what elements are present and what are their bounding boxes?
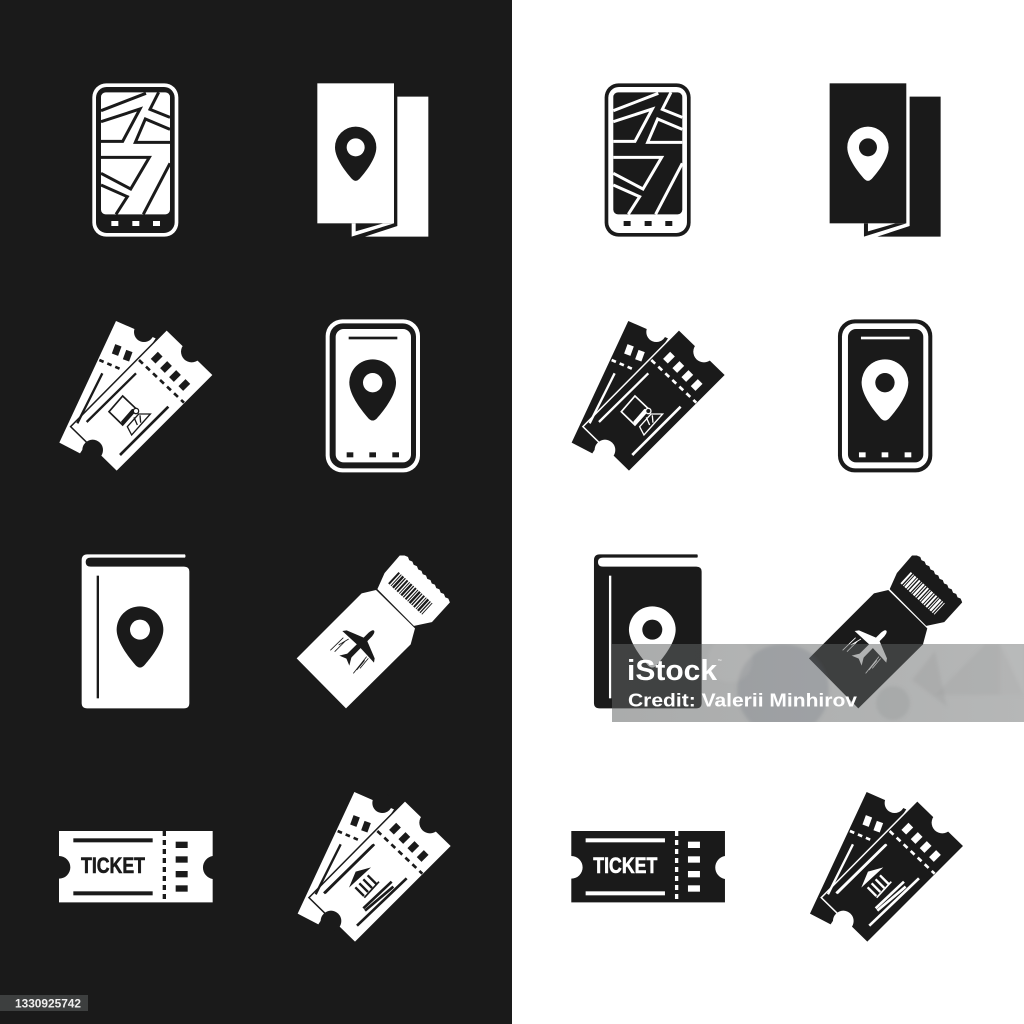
icon: guide book with location pin, dark [594, 554, 702, 708]
stock image id tag: 1330925742 [15, 998, 81, 1010]
icon: pair of museum tickets [298, 792, 451, 942]
panel: dark left background [0, 0, 512, 1024]
icon: airline boarding pass, dark [809, 556, 962, 708]
icon: pair of museum tickets, dark [810, 792, 963, 942]
watermark brand: iStock [627, 655, 718, 687]
icon: ticket stub, dark: TICKET [593, 853, 658, 878]
icon: smartphone with city map [92, 83, 178, 237]
icon: smartphone with location pin [326, 319, 420, 472]
watermark trademark: ™ [718, 658, 722, 663]
stock image id tag [0, 995, 88, 1011]
icon: pair of train tickets [59, 321, 212, 471]
panel: dark icons on white [571, 83, 963, 942]
watermark credit: Credit: Valerii Minhirov [628, 690, 857, 710]
icon: airline boarding pass [297, 556, 449, 708]
icon: folded map with location pin [317, 83, 428, 237]
panel: white icons on dark [59, 83, 451, 942]
icon: smartphone with location pin, dark [838, 319, 932, 472]
icon: ticket stub [59, 831, 213, 902]
watermark band [612, 644, 1024, 722]
icon: pair of train tickets, dark [572, 321, 725, 471]
icon: ticket stub: TICKET [81, 853, 145, 878]
panel: white right background [512, 0, 1024, 1024]
icon: guide book with location pin [82, 554, 189, 708]
icon: ticket stub, dark [571, 831, 725, 902]
icon: smartphone with city map, dark [605, 83, 691, 237]
icon: folded map with location pin, dark [830, 83, 941, 237]
